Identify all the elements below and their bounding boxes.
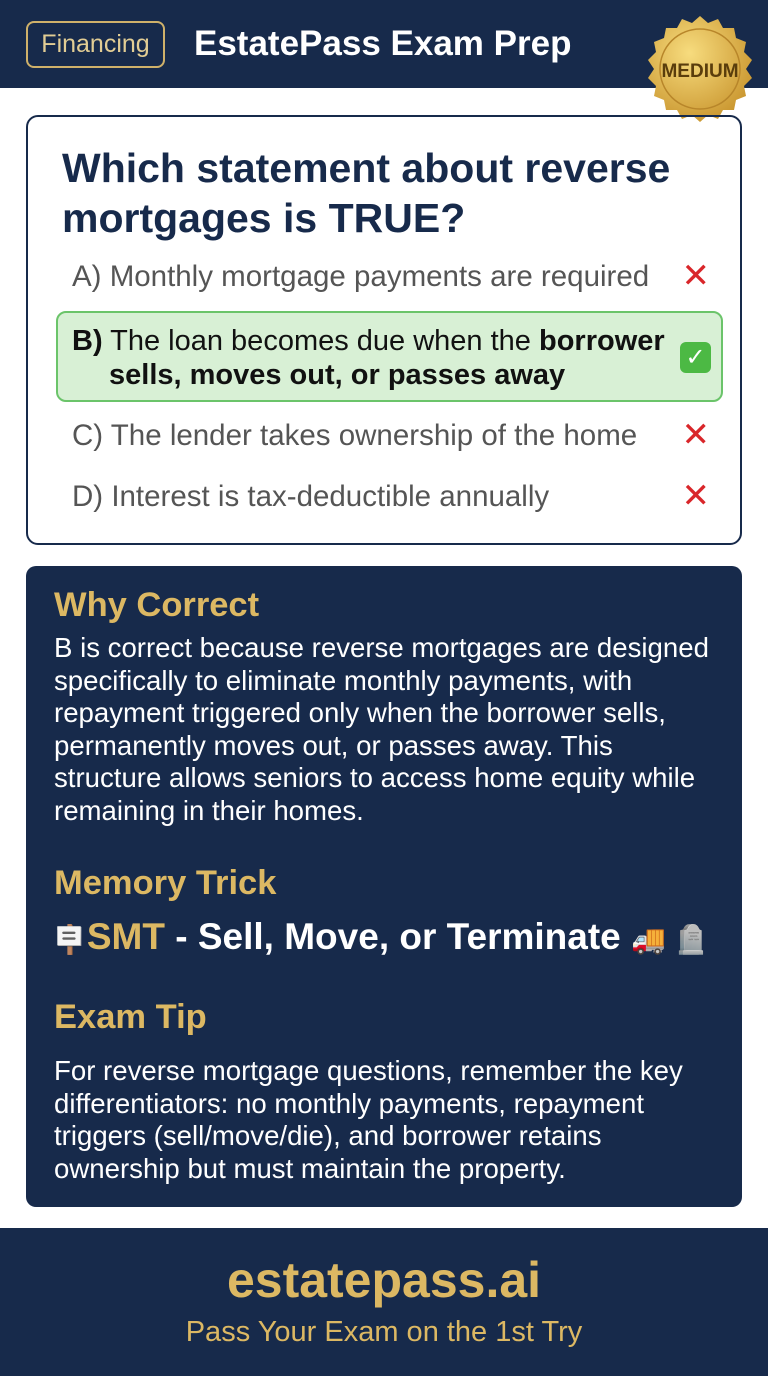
check icon: ✓ bbox=[685, 344, 706, 371]
memory trick heading: Memory Trick bbox=[54, 864, 276, 902]
option D bbox=[72, 477, 710, 515]
option B correct: B) The loan becomes due when the borrower bbox=[72, 325, 665, 357]
difficulty medal: MEDIUM bbox=[661, 61, 739, 82]
header title: EstatePass Exam Prep bbox=[194, 24, 571, 63]
exam tip text: ownership but must maintain the property. bbox=[54, 1152, 566, 1184]
category badge: Financing bbox=[41, 30, 150, 58]
option C: C) The lender takes ownership of the home bbox=[72, 419, 637, 452]
exam tip heading: Exam Tip bbox=[54, 998, 207, 1036]
why correct heading: Why Correct bbox=[54, 586, 259, 624]
why correct text: permanently moves out, or passes away. This bbox=[54, 730, 613, 760]
memory trick text: 🪧SMT - Sell, Move, or Terminate 🚚 🪦 bbox=[52, 916, 709, 957]
question card bbox=[26, 115, 742, 545]
brand: estatepass.ai bbox=[227, 1252, 541, 1308]
footer bbox=[0, 1228, 768, 1376]
exam tip text: triggers (sell/move/die), and borrower retains bbox=[54, 1120, 602, 1151]
option B correct bbox=[56, 311, 723, 402]
why correct text: remaining in their homes. bbox=[54, 794, 364, 826]
difficulty medal bbox=[648, 16, 752, 122]
why correct text bbox=[54, 632, 709, 826]
option D: ✕ bbox=[682, 477, 710, 515]
option C: ✕ bbox=[682, 416, 710, 454]
exam tip text: differentiators: no monthly payments, repayment bbox=[54, 1088, 644, 1118]
option D: D) Interest is tax-deductible annually bbox=[72, 480, 549, 513]
exam tip text bbox=[54, 1055, 683, 1184]
why correct text: repayment triggered only when the borrower sells, bbox=[54, 697, 666, 728]
tagline: Pass Your Exam on the 1st Try bbox=[186, 1316, 582, 1348]
option A: A) Monthly mortgage payments are required bbox=[72, 260, 649, 293]
check icon bbox=[680, 342, 711, 373]
exam tip text: For reverse mortgage questions, remember the key bbox=[54, 1055, 683, 1086]
header bar bbox=[0, 0, 768, 88]
option B correct: sells, moves out, or passes away bbox=[109, 359, 565, 391]
why correct text: structure allows seniors to access home equity while bbox=[54, 762, 695, 793]
category badge bbox=[26, 21, 165, 68]
explanation panel bbox=[26, 566, 742, 1207]
why correct text: specifically to eliminate monthly payments, with bbox=[54, 664, 632, 696]
question: Which statement about reverse mortgages is TRUE? bbox=[62, 145, 670, 241]
option A: ✕ bbox=[682, 257, 710, 295]
why correct text: B is correct because reverse mortgages are designed bbox=[54, 632, 709, 663]
